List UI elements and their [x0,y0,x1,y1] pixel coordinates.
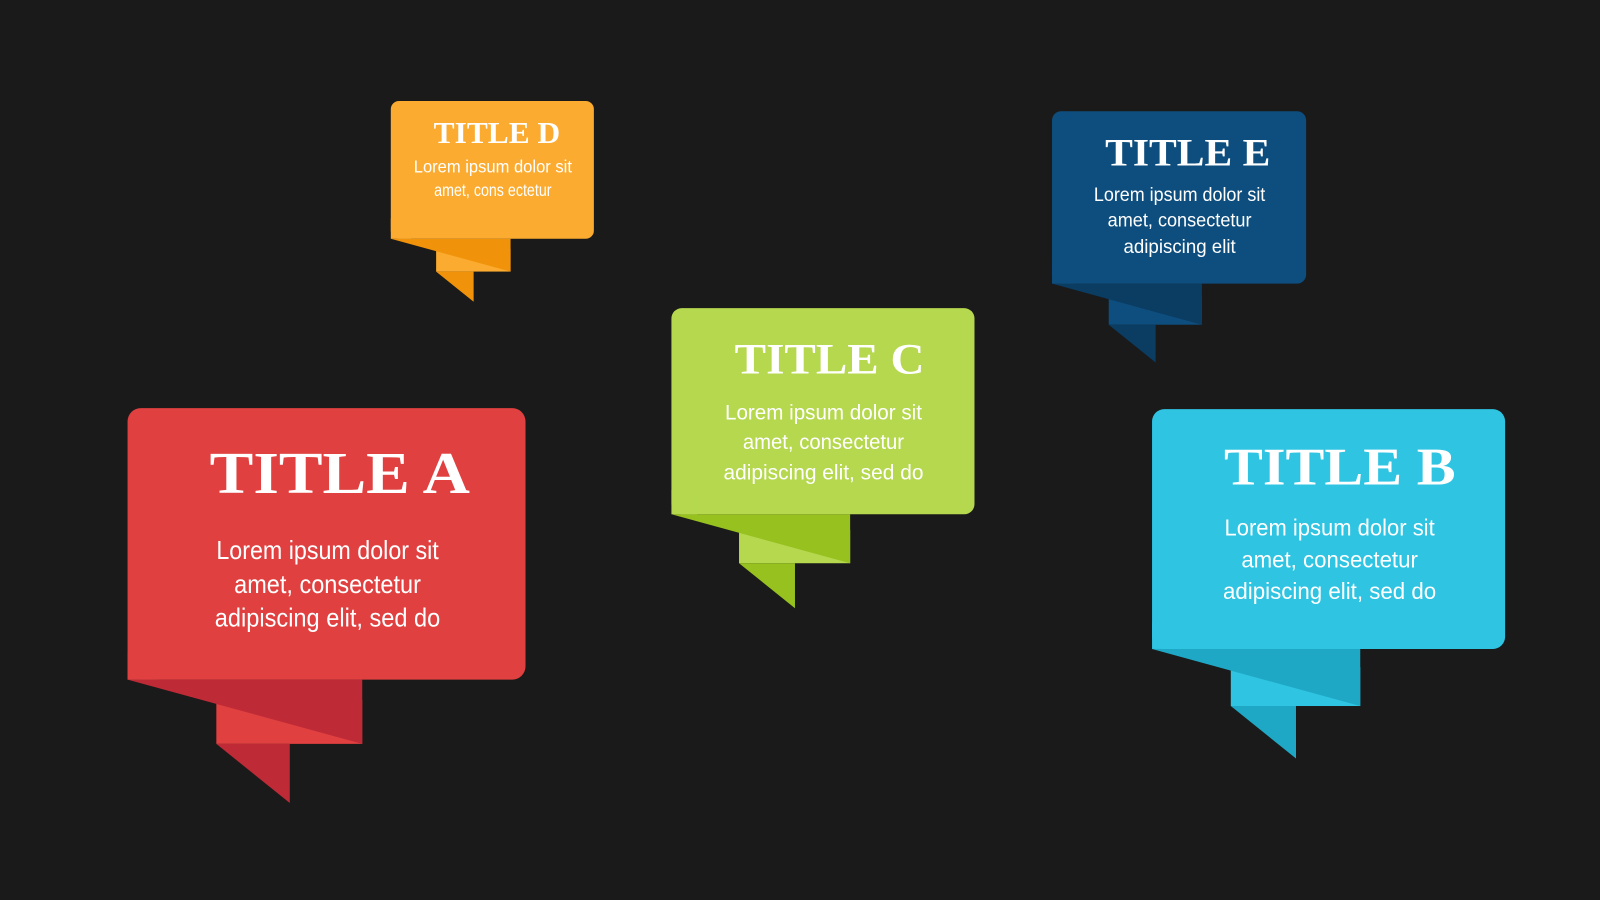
callout: title E: TITLE E [1105,131,1270,174]
callout: title E: amet, consectetur [1108,210,1252,232]
callout: title B [1152,409,1505,759]
callout: title A: amet, consectetur [234,571,421,599]
callout: title C: amet, consectetur [743,430,904,454]
callout: title B: Lorem ipsum dolor sit [1224,515,1435,541]
callout: title D: amet, cons ectetur [434,180,552,200]
callout: title C [671,308,974,608]
callout: title D: Lorem ipsum dolor sit [414,156,572,176]
callout: title A: adipiscing elit, sed do [215,605,440,633]
callout: title C: adipiscing elit, sed do [723,461,923,485]
callout: title B: amet, consectetur [1241,546,1418,572]
callout: title A [128,408,526,803]
callout: title A: Lorem ipsum dolor sit [216,537,439,565]
callout: title B: adipiscing elit, sed do [1223,578,1436,604]
callout: title E: adipiscing elit [1123,236,1236,258]
callout: title E: Lorem ipsum dolor sit [1094,184,1266,206]
callout: title C: TITLE C [735,335,924,383]
callout: title E [1052,111,1306,363]
callout: title D [391,101,594,302]
callout: title B: TITLE B [1224,439,1456,497]
callout: title C: Lorem ipsum dolor sit [725,400,922,424]
callout: title A: TITLE A [210,440,470,506]
callout: title D: TITLE D [434,116,560,150]
